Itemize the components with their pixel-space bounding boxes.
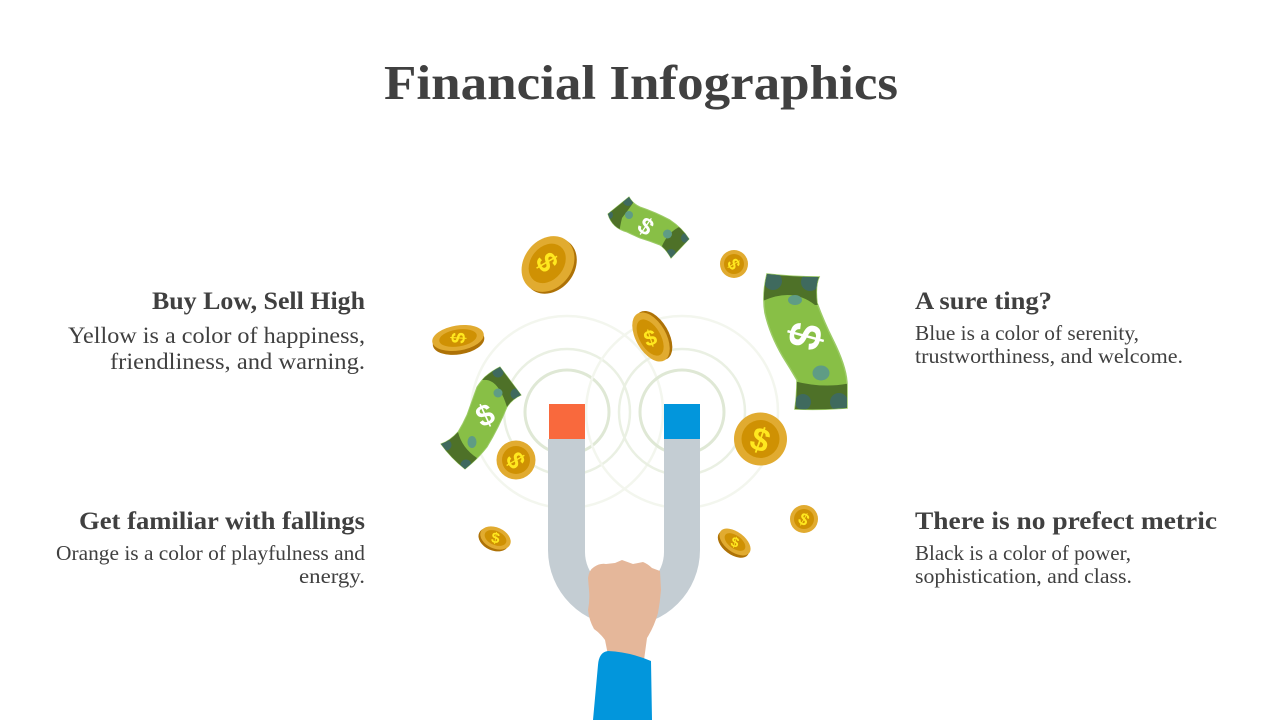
body: a sure ting: Blue is a color of serenity, xyxy=(915,321,1139,345)
body: buy low xyxy=(68,323,365,374)
sleeve xyxy=(593,651,652,720)
body: fallings: energy. xyxy=(299,564,365,588)
coin: bottom left tilted xyxy=(475,521,514,556)
body: metric: Black is a color of power, xyxy=(915,541,1131,565)
body: fallings: Orange is a color of playfulness and xyxy=(56,541,365,565)
fist xyxy=(588,560,661,660)
title: Financial Infographics xyxy=(384,55,898,110)
body: metric xyxy=(915,541,1132,588)
text block: get familiar with fallings xyxy=(56,508,365,588)
body: buy low: Yellow is a color of happiness, xyxy=(68,323,365,348)
body: buy low: friendliness, and warning. xyxy=(110,349,365,374)
body: a sure ting: trustworthiness, and welcome. xyxy=(915,344,1183,368)
bill: top xyxy=(608,196,690,259)
body: fallings xyxy=(56,541,365,588)
text block: a sure ting xyxy=(915,288,1183,368)
heading: metric: There is no prefect metric xyxy=(915,508,1217,535)
coin: small top right xyxy=(720,250,748,278)
hand holding magnet xyxy=(588,560,661,720)
coin: upper left tilted xyxy=(511,226,588,304)
magnet pole: blue xyxy=(664,404,700,439)
magnetic field rings xyxy=(471,316,778,508)
coin: large right xyxy=(734,412,787,466)
bill: left: $ xyxy=(471,397,500,434)
coin: bottom right tilted xyxy=(713,523,755,563)
bill: large right: $ xyxy=(777,317,833,355)
coin: left round: $ xyxy=(500,447,531,474)
horseshoe magnet xyxy=(548,404,700,626)
heading: a sure ting: A sure ting? xyxy=(915,288,1052,315)
coin: left flat: $ xyxy=(448,332,470,344)
coin: upper left tilted: $ xyxy=(528,247,564,277)
coin: bottom right tilted: $ xyxy=(729,533,741,551)
coin: small right: $ xyxy=(795,509,813,530)
coin: bottom left tilted: $ xyxy=(490,529,502,548)
magnet body xyxy=(548,439,700,626)
heading: fallings: Get familiar with fallings xyxy=(79,508,365,535)
body: metric: sophistication, and class. xyxy=(915,564,1132,588)
text block: no perfect metric xyxy=(915,508,1217,588)
body: a sure ting xyxy=(915,321,1183,368)
coin: small right xyxy=(790,505,818,533)
coin: large right: $ xyxy=(745,419,775,460)
coin: centre tilted: $ xyxy=(641,324,660,352)
heading: buy low: Buy Low, Sell High xyxy=(152,288,365,315)
coin: centre tilted xyxy=(625,305,680,368)
bill: large right xyxy=(763,273,848,410)
coin: small top right: $ xyxy=(723,255,744,274)
bill: top: $ xyxy=(632,212,659,242)
coin: left flat xyxy=(430,322,486,358)
magnet pole: orange xyxy=(549,404,585,439)
bill: left xyxy=(440,366,522,470)
text block: buy low, sell high xyxy=(68,288,365,374)
coin: left round xyxy=(496,440,536,480)
